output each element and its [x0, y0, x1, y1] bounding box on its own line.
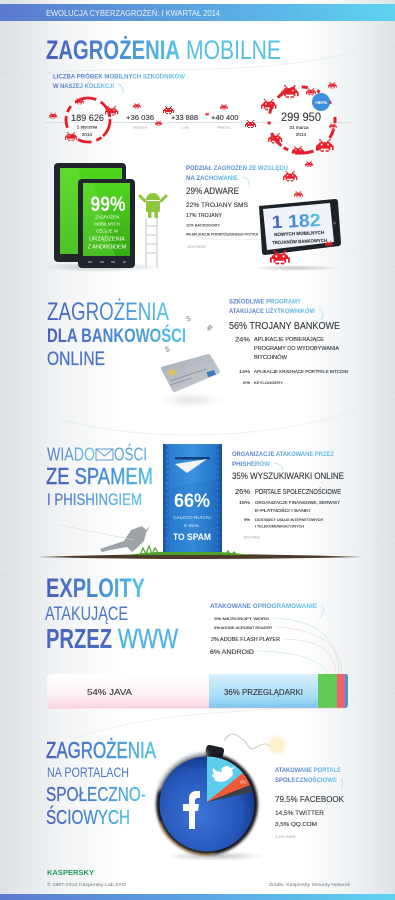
bomb pie chart: [156, 732, 290, 861]
blue mailbox panel: [163, 444, 222, 552]
breakdown list: behavior: PODZIAŁ ZAGROŻEŃ ZE WZGLĘDU: [186, 164, 289, 172]
breakdown list: banking malware: 56% TROJANY BANKOWE: [229, 321, 340, 332]
breakdown list: phishing targets: I TELEKOMUNIKACYJNYCH: [255, 524, 305, 528]
logo: Kaspersky: KASPERSKY: [47, 868, 94, 877]
breakdown list: banking malware: SZKODLIWE PROGRAMY: [229, 298, 302, 306]
breakdown list: behavior: 17% TROJANY: [186, 213, 223, 219]
heading: social networks: NA PORTALACH: [47, 764, 129, 780]
tilted phone: banking trojans: TROJANÓW BANKOWYCH: [272, 236, 328, 245]
software list: 2% ADOBE FLASH PLAYER: [211, 637, 280, 643]
breakdown list: banking malware: 24%: [235, 336, 250, 344]
subheading: sample counts: W NASZEJ KOLEKCJI: [53, 83, 114, 90]
breakdown list: social portals: SPOŁECZNOŚCIOWE: [275, 777, 337, 784]
start value circle: [65, 98, 118, 142]
blue mailbox panel: 66%: [174, 490, 210, 512]
section: web exploits: [45, 573, 348, 708]
breakdown list: phishing targets: ORGANIZACJE FINANSOWE, SERWISY: [255, 500, 341, 506]
pie slice: twitter: [207, 756, 243, 802]
ground with grass: [38, 546, 362, 559]
tablet with 99 percent: [40, 163, 160, 272]
phone with 99 percent: Z ANDROIDEM: [88, 244, 127, 250]
heading: exploits: ATAKUJĄCE: [45, 604, 128, 625]
heading: exploits: EXPLOITY: [46, 573, 145, 603]
phone with 99 percent: [78, 179, 135, 268]
stacked bar: 54% JAVA: [87, 688, 133, 697]
breakdown list: behavior: 9% APLIKACJE PODWYŻSZONEGO RYZYKA: [186, 232, 259, 236]
section: spam and phishing: [38, 444, 362, 559]
breakdown list: social portals: 2,5% INNE: [275, 835, 297, 839]
phone with 99 percent: CELUJE W: [96, 228, 119, 234]
heading: online banking: ONLINE: [47, 349, 105, 370]
start value circle: 1 stycznia: [77, 124, 98, 130]
breakdown list: banking malware: KEYLOGGERY: [254, 381, 284, 385]
flying money icons: ₽: [206, 323, 214, 334]
icon: twitter bird: [212, 766, 235, 782]
breakdown list: social portals: ATAKOWANE PORTALE: [275, 768, 341, 774]
invaders on timeline: [49, 103, 256, 128]
software list: 3% ADOBE ACROBAT READER: [214, 626, 273, 630]
software list: [210, 603, 317, 656]
software list: 6% ANDROID: [210, 649, 255, 656]
blue mailbox panel: TO SPAM: [173, 532, 211, 542]
monthly increments: Marzec: [217, 124, 231, 130]
icon: facebook f: [183, 791, 200, 829]
heading: mobile threats: MOBILNE: [186, 35, 281, 65]
blue mailbox panel: E-MAIL: [184, 523, 200, 528]
breakdown list: phishing targets: PORTALE SPOŁECZNOŚCIOWE: [255, 487, 341, 496]
subheading: sample counts: [53, 72, 185, 94]
bomb pie chart: QQ: [240, 780, 246, 784]
heading: online banking: ZAGROŻENIA: [47, 297, 169, 326]
heading: online banking: [47, 297, 186, 370]
phone with 99 percent: 99%: [90, 193, 126, 216]
heading: social networks: ŚCIOWYCH: [46, 805, 130, 829]
breakdown list: social portals: 3,5% QQ.COM: [275, 822, 317, 828]
software list: ATAKOWANE OPROGRAMOWANIE: [210, 603, 317, 610]
android on ladder: [140, 193, 166, 268]
breakdown list: behavior: 22% TROJANY SMS: [186, 202, 248, 209]
breakdown list: behavior: 29% ADWARE: [186, 186, 239, 196]
breakdown list: banking malware: APLIKACJE POBIERAJĄCE: [254, 337, 325, 343]
heading: spam: ZE SPAMEM: [46, 463, 153, 489]
growth badge: +60%: [315, 100, 328, 106]
breakdown list: banking malware: BITCOINÓW: [254, 354, 287, 361]
section: social networks: [46, 732, 344, 861]
breakdown list: phishing targets: 35% WYSZUKIWARKI ONLINE: [232, 471, 344, 481]
dog silhouette: [60, 525, 150, 552]
breakdown list: social portals: 79,5% FACEBOOK: [275, 794, 344, 804]
phone with 99 percent: URZĄDZENIA: [89, 236, 125, 242]
tilted phone: banking trojans: NOWYCH MOBILNYCH: [274, 230, 325, 237]
flying money icons: $: [164, 344, 171, 354]
section: mobile threats: [40, 35, 351, 272]
pie slice: other: [207, 785, 252, 802]
heading: spam: WIADO: [47, 444, 95, 464]
end value circle: 31 marca: [289, 125, 309, 130]
breakdown list: behavior: 11% BACKDOORY: [186, 224, 220, 228]
breakdown list: banking malware: PROGRAMY DO WYDOBYWANIA: [254, 346, 340, 352]
breakdown list: banking malware: 14%: [239, 369, 250, 374]
monthly increments: Luty: [181, 124, 189, 130]
monthly increments: [126, 113, 238, 130]
source note: Źródło: Kaspersky Security Network: [269, 882, 351, 887]
header bar: [0, 4, 395, 21]
credit card: [156, 354, 224, 408]
blue mailbox panel: CAŁEGO RUCHU: [173, 515, 211, 520]
software list: 3% MICROSOFT WORD: [214, 617, 270, 621]
heading: mobile threats: ZAGROŻENIA: [46, 35, 180, 65]
heading: spam: I PHISHINGIEM: [47, 490, 142, 509]
breakdown list: phishing targets: 9%: [244, 518, 250, 522]
breakdown list: behavior: 12% INNE: [187, 245, 206, 249]
breakdown list: phishing targets: 15%: [239, 500, 251, 506]
phone with 99 percent: MOBILNYCH: [94, 222, 120, 226]
flying money icons: [164, 314, 214, 354]
breakdown list: banking malware: 6%: [243, 380, 251, 385]
stacked bar: [47, 674, 348, 708]
start value circle: 189 626: [71, 113, 104, 123]
heading: spam: OŚCI: [114, 444, 147, 464]
end value circle: 2014: [296, 132, 307, 137]
breakdown list: phishing targets: E-PŁATNOŚCI I BANKI: [255, 506, 310, 514]
breakdown list: behavior: NA ZACHOWANIE: [186, 175, 238, 182]
breakdown list: phishing targets: [232, 451, 344, 540]
breakdown list: banking malware: ATAKUJĄCE UŻYTKOWNIKÓW: [229, 307, 315, 315]
end value circle: [261, 82, 337, 155]
heading: social networks: [46, 737, 156, 829]
scattered invaders: [283, 161, 313, 197]
heading: exploits: WWW: [118, 623, 178, 654]
pie slice: qq: [207, 773, 250, 802]
heading: social networks: ZAGROŻENIA: [46, 737, 156, 763]
tilted phone: banking trojans: [250, 199, 341, 271]
monthly increments: Styczeń: [133, 124, 147, 130]
section: online banking: [47, 297, 348, 408]
end value circle: 299 950: [281, 112, 321, 124]
icon: envelope: [96, 449, 113, 460]
footer bar: [0, 894, 395, 900]
connector lines: [257, 604, 342, 674]
breakdown list: phishing targets: PHISHERÓW: [232, 460, 270, 468]
monthly increments: +36 036: [126, 113, 154, 122]
breakdown list: phishing targets: ORGANIZACJE ATAKOWANE PRZEZ: [232, 451, 334, 458]
heading: spam: [46, 444, 153, 509]
breakdown list: phishing targets: 26%: [235, 489, 250, 496]
flying money icons: $: [185, 314, 193, 324]
heading: exploits: [45, 573, 178, 654]
breakdown list: behavior: [186, 164, 289, 249]
tilted phone: banking trojans: 1 182: [271, 210, 321, 232]
heading: social networks: SPOŁECZNO-: [46, 784, 146, 806]
breakdown list: social portals: 14,5% TWITTER: [275, 810, 324, 817]
start value circle: 2014: [82, 132, 93, 137]
phone with 99 percent: ZAGROŻEŃ: [95, 214, 119, 220]
subheading: sample counts: LICZBA PRÓBEK MOBILNYCH SZKODNIKÓW: [53, 72, 185, 80]
heading: exploits: PRZEZ: [46, 623, 112, 654]
timeline: [45, 82, 351, 197]
header title: EWOLUCJA CYBERZAGROŻEŃ: I KWARTAŁ 2014: [46, 8, 220, 18]
breakdown list: banking malware: [229, 298, 348, 385]
breakdown list: phishing targets: 15% INNE: [243, 536, 261, 540]
monthly increments: +40 400: [211, 113, 238, 122]
breakdown list: social portals: [275, 768, 344, 839]
monthly increments: +33 888: [171, 113, 198, 122]
copyright: © 1997-2014 Kaspersky Lab ZAO: [47, 882, 127, 887]
stacked bar: 36% PRZEGLĄDARKI: [224, 688, 303, 697]
heading: online banking: DLA BANKOWOŚCI: [47, 325, 186, 347]
breakdown list: phishing targets: DOSTAWCY USŁUG INTERNETOWYCH: [255, 518, 324, 522]
breakdown list: banking malware: APLIKACJE KRADNĄCE PORTFELE BITCOIN: [254, 369, 348, 374]
